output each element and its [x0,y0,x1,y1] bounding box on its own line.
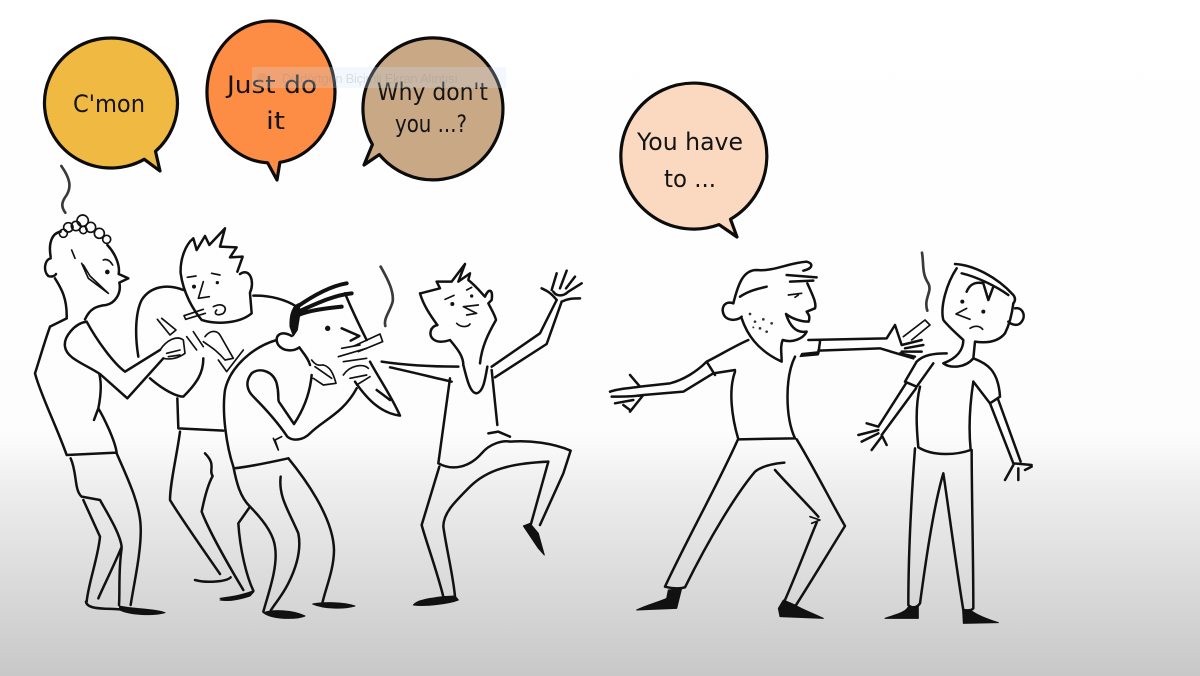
speech bubble: C'mon [44,38,177,171]
figure: curly-haired smoker, far left [35,166,185,615]
smoke wisp [922,253,930,311]
raised hand [542,271,582,302]
speech bubble: Just do it [207,21,335,180]
speech bubble: Why don't you ...? [363,38,503,180]
speech bubble: You have to ...: to ... [664,165,716,193]
figure: man with dark hair smoking, centre-left [220,283,400,618]
speech bubble: Why don't you ...?: Why don't [377,78,488,106]
figure: spiky-haired man lighting a cigarette [136,228,297,600]
smoke wisp [381,267,393,326]
figure: man pushing cigarette away, right [610,262,930,618]
cigarette [354,334,383,352]
speech bubble: Why don't you ...?: you ...? [395,110,467,138]
speech bubble: Just do it: Just do [225,71,317,99]
arms and hands [858,383,916,450]
cigarette [184,309,205,319]
outstretched arms [610,340,748,412]
faint screenshot caption banner: Dikdörtgen Biçimli Ekran Alıntısı [282,71,458,86]
figure: boy holding a cigarette, far right [858,253,1032,623]
cigarette [903,320,930,340]
speech bubble: You have to ...: You have [636,128,743,156]
speech bubble: C'mon: C'mon [73,90,145,118]
faint screenshot caption banner [252,67,506,88]
smoke wisp [61,166,69,213]
speech bubble: You have to ... [621,83,767,237]
figure: dancing man with raised arm [381,264,582,605]
speech bubble: Just do it: it [266,107,285,135]
